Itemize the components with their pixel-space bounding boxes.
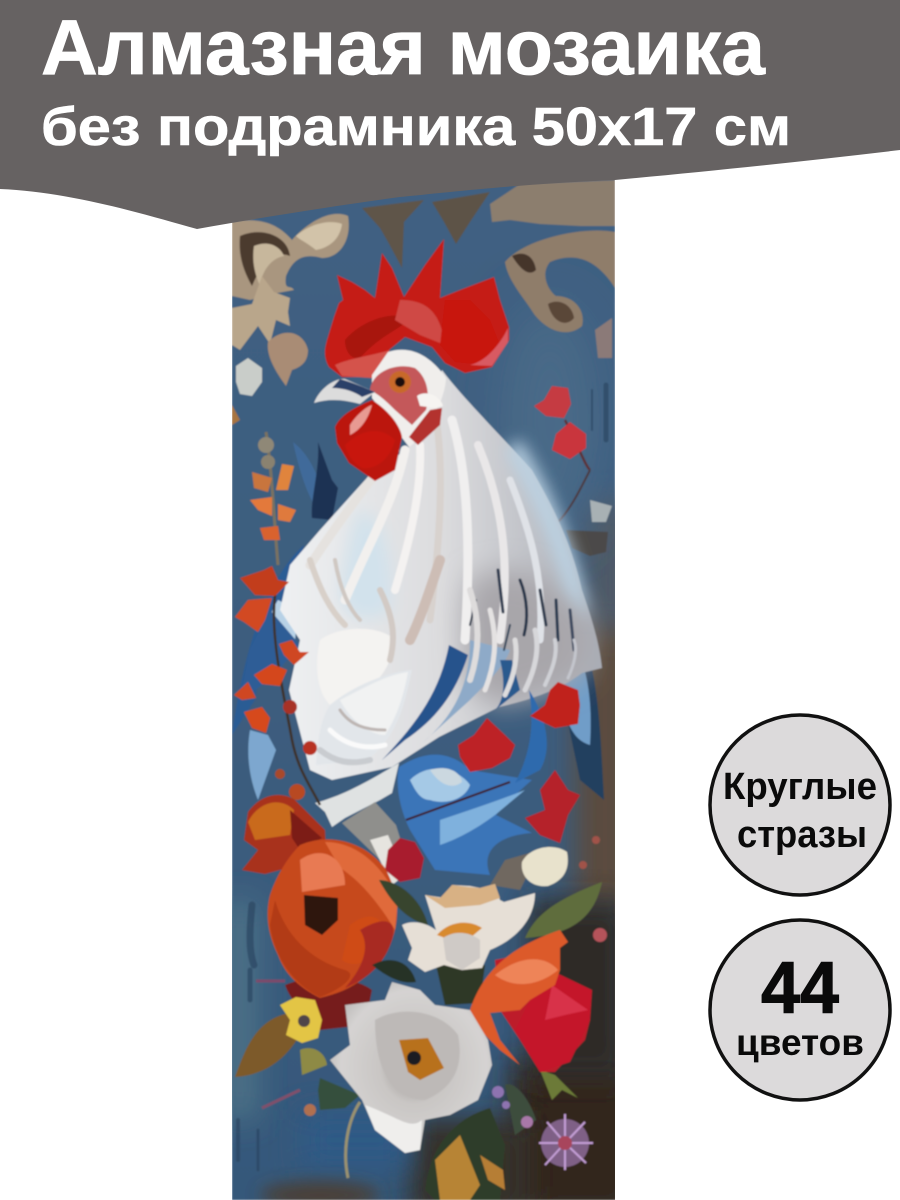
blue tail swirl xyxy=(398,690,547,890)
badge: round rhinestones: Круглые xyxy=(723,766,877,808)
wing white tips xyxy=(340,710,385,730)
dark blue wing band xyxy=(382,645,468,760)
small purple sprig xyxy=(256,836,607,1178)
light blue chest patch xyxy=(340,510,391,618)
badge: 44 colours xyxy=(710,920,890,1100)
wattle xyxy=(335,400,402,481)
painting background xyxy=(222,175,640,1200)
eye xyxy=(389,371,411,393)
badge: round rhinestones xyxy=(710,715,890,895)
flower: red orange dahlia xyxy=(470,930,592,1072)
badge: 44 colours: цветов xyxy=(736,1022,864,1063)
painting: rooster with flowers xyxy=(222,175,640,1200)
flower: large orange peony xyxy=(268,839,398,998)
orange sprigs left xyxy=(234,566,320,805)
badge: round rhinestones: стразы xyxy=(737,814,867,856)
badge: 44 colours: 44 xyxy=(761,948,839,1029)
flower: dark red tulip xyxy=(242,795,326,874)
title: Алмазная мозаика xyxy=(41,3,766,91)
rooster body xyxy=(280,370,602,780)
ear lobe xyxy=(417,393,443,408)
flower: cream lily xyxy=(402,884,535,972)
white tuft xyxy=(315,763,410,885)
small sprig upper left xyxy=(250,432,296,565)
dark streaks on back xyxy=(498,570,503,612)
red blossoms upper right xyxy=(534,386,612,556)
leaves center xyxy=(235,880,602,1200)
beak xyxy=(314,379,375,404)
flower: yellow xyxy=(280,997,322,1043)
grey shaded back xyxy=(464,571,590,705)
tail feathers right xyxy=(564,670,604,800)
header band xyxy=(0,0,900,229)
subtitle: без подрамника 50х17 см xyxy=(41,97,791,157)
flower: purple daisy xyxy=(539,1114,593,1170)
tail feathers left xyxy=(232,545,304,800)
red blossoms on tail xyxy=(385,682,580,882)
ornament: top right scrolls xyxy=(362,180,615,358)
wing white xyxy=(332,678,378,706)
dark feathers behind neck xyxy=(293,442,338,520)
background brush strokes xyxy=(238,385,606,1170)
leaf: dark under peony xyxy=(285,977,372,1030)
flower: white rose xyxy=(330,982,492,1153)
rooster comb xyxy=(325,239,509,378)
light streaks on back xyxy=(470,590,478,680)
rooster head xyxy=(314,350,446,481)
white bud xyxy=(522,847,568,886)
ornament: top left scrolls xyxy=(232,214,349,425)
hackle feather strokes xyxy=(310,410,576,762)
